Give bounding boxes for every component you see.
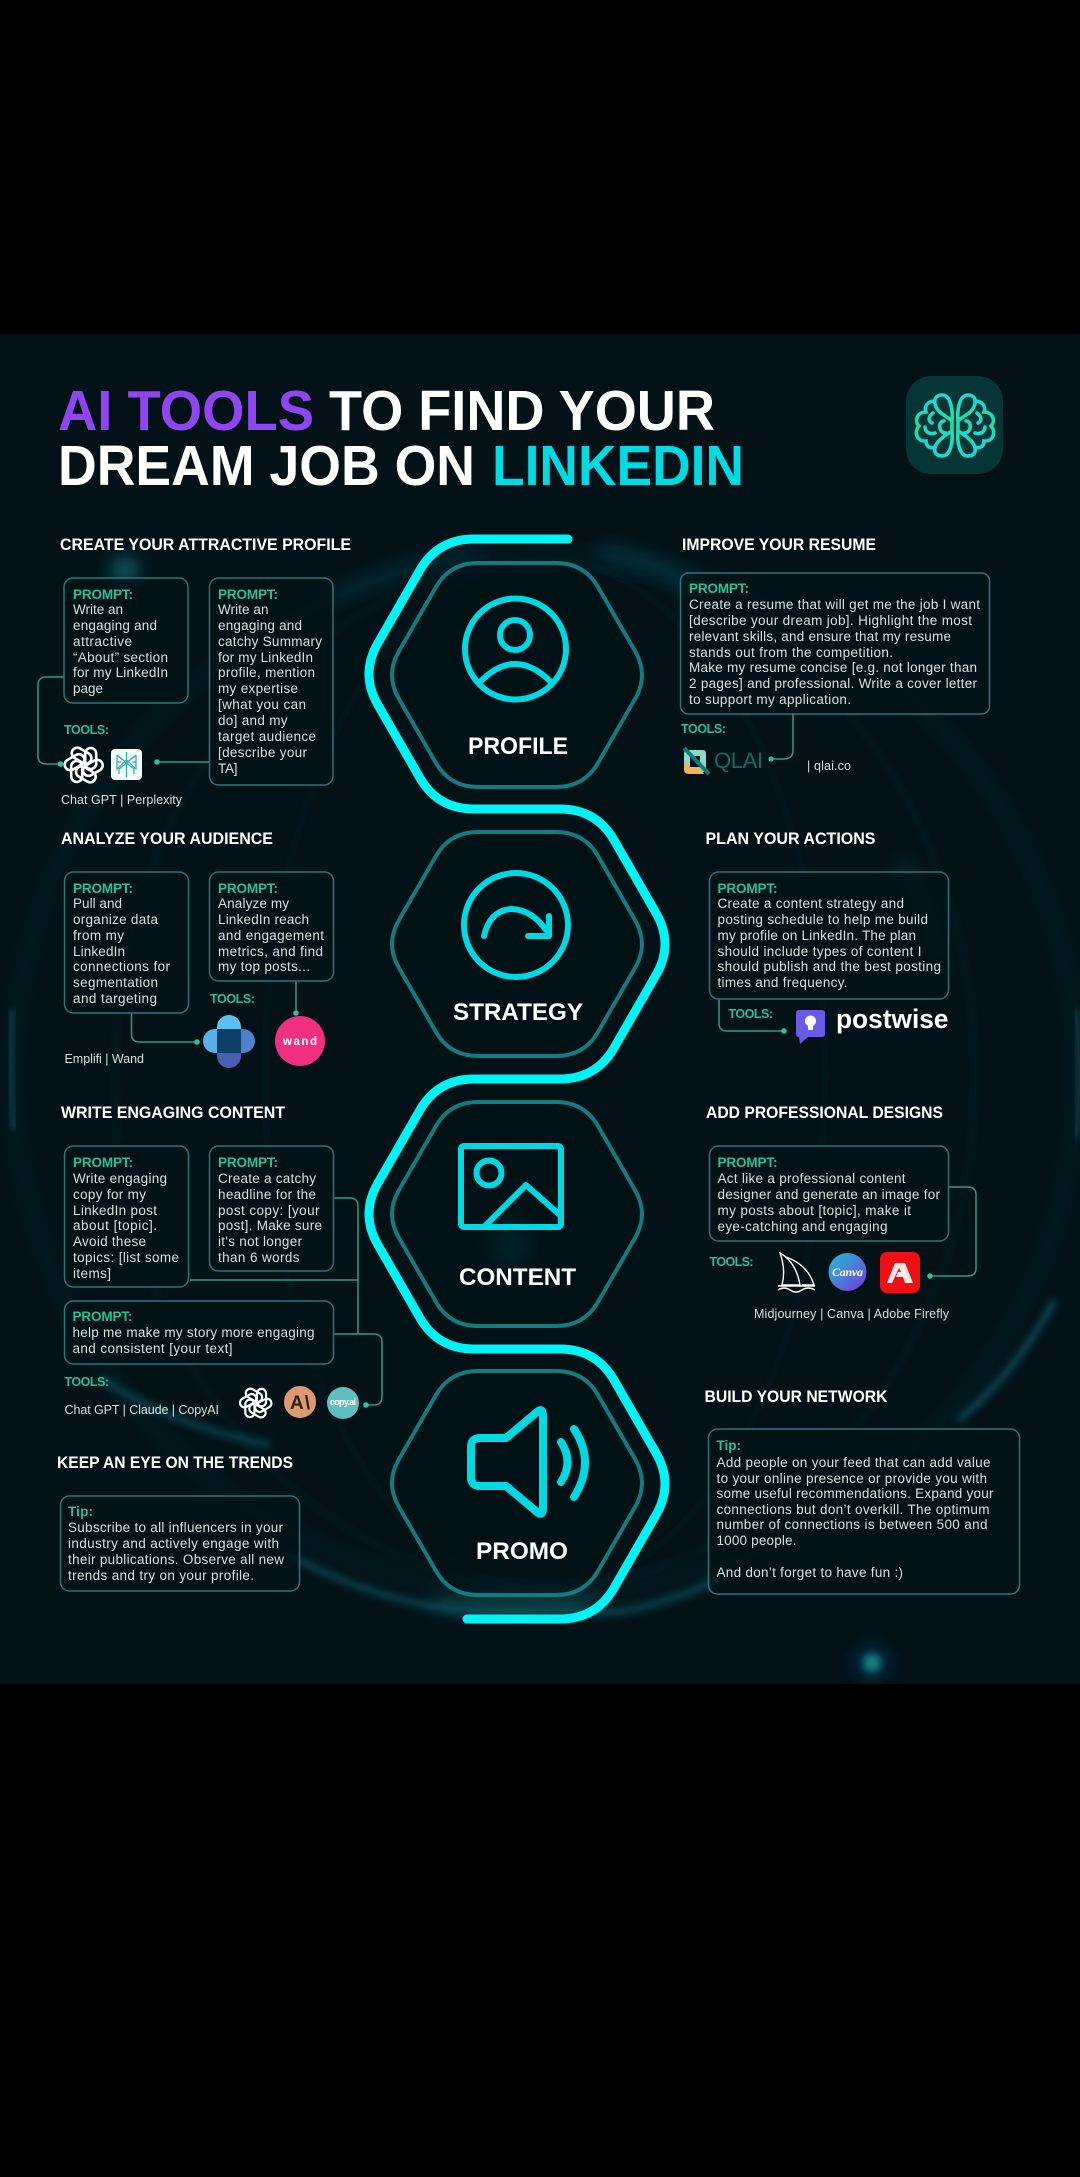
prompt box 2: Write an bbox=[218, 602, 268, 617]
icon: brain logo bbox=[906, 376, 1003, 474]
tip box: connections but don’t overkill. The optimum bbox=[716, 1502, 990, 1517]
tip box: to your online presence or provide you with bbox=[716, 1471, 987, 1486]
tip box bbox=[708, 1429, 1020, 1594]
prompt box 1: organize data bbox=[73, 912, 158, 927]
prompt box 1: connections for bbox=[73, 959, 170, 974]
prompt box: to support my application. bbox=[689, 692, 851, 707]
prompt box 2: Create a catchy bbox=[218, 1171, 316, 1186]
prompt box 2: my expertise bbox=[218, 681, 298, 696]
prompt box 2: Analyze my bbox=[218, 896, 289, 911]
prompt box 2: metrics, and find bbox=[218, 944, 323, 959]
prompt box: PROMPT: bbox=[689, 581, 749, 596]
hexagon: promo bbox=[392, 1371, 642, 1595]
heading: BUILD YOUR NETWORK bbox=[704, 1387, 888, 1406]
prompt box 1: LinkedIn bbox=[73, 944, 125, 959]
prompt box 1: about [topic]. bbox=[73, 1218, 157, 1233]
panel: improve your resume bbox=[680, 535, 990, 774]
prompt box 2: PROMPT: bbox=[218, 881, 278, 896]
prompt box 1: Write an bbox=[73, 602, 123, 617]
heading: PLAN YOUR ACTIONS bbox=[706, 829, 876, 848]
heading: ANALYZE YOUR AUDIENCE bbox=[61, 829, 273, 848]
panel: create your attractive profile bbox=[38, 535, 351, 807]
icon: profile bbox=[465, 598, 566, 700]
title: AI TOOLS bbox=[58, 379, 314, 443]
icon: chatgpt bbox=[63, 746, 105, 784]
icon: postwise bbox=[796, 1010, 825, 1044]
tools label: TOOLS: bbox=[210, 992, 255, 1006]
label: PROFILE: PROFILE bbox=[468, 733, 568, 760]
prompt box 2: TA] bbox=[218, 761, 238, 776]
connectors bbox=[190, 1198, 382, 1408]
tools label: TOOLS: bbox=[728, 1007, 773, 1021]
tool names: Midjourney | Canva | Adobe Firefly bbox=[754, 1307, 950, 1321]
prompt box 1: engaging and bbox=[73, 618, 157, 633]
icon: wand bbox=[275, 1016, 325, 1066]
prompt box 2: PROMPT: bbox=[218, 587, 278, 602]
prompt box: Create a resume that will get me the job I want bbox=[689, 597, 980, 612]
icon: adobe firefly bbox=[880, 1252, 920, 1293]
prompt box 2: [what you can bbox=[218, 697, 306, 712]
tip box: Tip: bbox=[68, 1504, 93, 1519]
tip box: number of connections is between 500 and bbox=[716, 1517, 988, 1532]
prompt box 3: and consistent [your text] bbox=[72, 1341, 232, 1356]
heading: ADD PROFESSIONAL DESIGNS bbox=[706, 1103, 943, 1122]
postwise wordmark: postwise bbox=[836, 1004, 948, 1034]
tools label: TOOLS: bbox=[710, 1255, 754, 1269]
prompt box 2: and engagement bbox=[218, 928, 324, 943]
prompt box 2: do] and my bbox=[218, 713, 288, 728]
icon: claude: A\ bbox=[290, 1393, 311, 1414]
icon: canva: Canva bbox=[832, 1265, 863, 1279]
tip box: some useful recommendations. Expand your bbox=[716, 1486, 994, 1501]
prompt box 3 bbox=[64, 1301, 334, 1364]
prompt box 1: copy for my bbox=[73, 1187, 146, 1202]
tool names: Chat GPT | Claude | CopyAI bbox=[64, 1403, 219, 1417]
prompt box 2: PROMPT: bbox=[218, 1155, 278, 1170]
prompt box 2: post copy: [your bbox=[218, 1203, 320, 1218]
prompt box: posting schedule to help me build bbox=[718, 912, 928, 927]
tool names: Chat GPT | Perplexity bbox=[61, 793, 183, 807]
prompt box 2: target audience bbox=[218, 729, 316, 744]
prompt box: relevant skills, and ensure that my resume bbox=[689, 629, 951, 644]
qlai wordmark: QLAI bbox=[714, 748, 763, 773]
title: LINKEDIN bbox=[492, 434, 744, 498]
prompt box: should include types of content I bbox=[718, 944, 922, 959]
prompt box 3: PROMPT: bbox=[72, 1309, 132, 1324]
icon: emplifi bbox=[203, 1015, 255, 1068]
icon: claude bbox=[284, 1386, 316, 1418]
title: TO FIND YOUR bbox=[329, 379, 715, 443]
icon: strategy arrow bbox=[464, 873, 568, 977]
prompt box bbox=[680, 573, 990, 714]
connector bbox=[719, 999, 787, 1034]
hexagon: profile bbox=[392, 563, 642, 787]
prompt box: times and frequency. bbox=[718, 975, 848, 990]
prompt box 2: engaging and bbox=[218, 618, 302, 633]
prompt box bbox=[710, 872, 948, 999]
prompt box: should publish and the best posting bbox=[718, 959, 941, 974]
panel: analyze your audience bbox=[61, 829, 334, 1068]
prompt box 2: [describe your bbox=[218, 745, 308, 760]
prompt box: my posts about [topic], make it bbox=[718, 1203, 911, 1218]
heading: WRITE ENGAGING CONTENT bbox=[61, 1103, 286, 1122]
background panel bbox=[0, 334, 1080, 1684]
prompt box 2: it's not longer bbox=[218, 1234, 302, 1249]
hexagon: content bbox=[392, 1102, 642, 1326]
prompt box 1: attractive bbox=[73, 634, 132, 649]
icon: image bbox=[461, 1146, 561, 1227]
prompt box 2: profile, mention bbox=[218, 665, 315, 680]
tip box: And don’t forget to have fun :) bbox=[716, 1565, 903, 1580]
prompt box 2: catchy Summary bbox=[218, 634, 322, 649]
prompt box 1 bbox=[64, 578, 188, 703]
prompt box 1: and targeting bbox=[73, 991, 157, 1006]
prompt box: PROMPT: bbox=[718, 1155, 778, 1170]
prompt box 1: PROMPT: bbox=[73, 587, 133, 602]
tool names: Emplifi | Wand bbox=[64, 1052, 144, 1066]
prompt box 2: LinkedIn reach bbox=[218, 912, 309, 927]
icon: canva bbox=[828, 1253, 866, 1291]
infographic canvas bbox=[0, 334, 1080, 1684]
prompt box 2 bbox=[210, 578, 333, 785]
panel: keep an eye on the trends bbox=[57, 1453, 300, 1591]
prompt box 2: post]. Make sure bbox=[218, 1218, 322, 1233]
tip box: Subscribe to all influencers in your bbox=[68, 1520, 284, 1535]
neon serpentine line bbox=[369, 539, 665, 1619]
prompt box 1: Write engaging bbox=[73, 1171, 167, 1186]
prompt box: stands out from the competition. bbox=[689, 645, 893, 660]
prompt box: my profile on LinkedIn. The plan bbox=[718, 928, 916, 943]
tools label: TOOLS: bbox=[64, 723, 109, 737]
prompt box: 2 pages] and professional. Write a cover letter bbox=[689, 676, 978, 691]
background sphere glow bbox=[10, 552, 1079, 1680]
prompt box 1: PROMPT: bbox=[73, 881, 133, 896]
prompt box 1: Avoid these bbox=[73, 1234, 146, 1249]
icon: speaker bbox=[471, 1410, 585, 1514]
label: CONTENT: CONTENT bbox=[459, 1264, 576, 1291]
prompt box: eye-catching and engaging bbox=[718, 1219, 888, 1234]
prompt box 2 bbox=[210, 1146, 334, 1271]
connector bbox=[927, 1187, 976, 1279]
icon: wand: wand bbox=[282, 1036, 317, 1048]
prompt box 1: from my bbox=[73, 928, 124, 943]
prompt box 1: “About” section bbox=[73, 650, 168, 665]
icon: chatgpt bbox=[238, 1387, 273, 1419]
panel: plan your actions bbox=[706, 829, 948, 1044]
prompt box 1: Pull and bbox=[73, 896, 122, 911]
label: STRATEGY: STRATEGY bbox=[453, 999, 583, 1026]
tools label: TOOLS: bbox=[64, 1375, 109, 1389]
tip box bbox=[60, 1496, 300, 1591]
prompt box 1: page bbox=[73, 681, 103, 696]
prompt box 1 bbox=[64, 872, 188, 1013]
title: DREAM JOB ON bbox=[58, 434, 475, 498]
tip box: Add people on your feed that can add value bbox=[716, 1455, 990, 1470]
tools label: TOOLS: bbox=[681, 722, 726, 736]
title bbox=[58, 379, 744, 498]
prompt box: Create a content strategy and bbox=[718, 896, 904, 911]
tip box: industry and actively engage with bbox=[68, 1536, 279, 1551]
tip box: Tip: bbox=[716, 1438, 741, 1453]
prompt box 2: headline for the bbox=[218, 1187, 316, 1202]
prompt box: designer and generate an image for bbox=[718, 1187, 940, 1202]
prompt box 1: PROMPT: bbox=[73, 1155, 133, 1170]
prompt box 2: my top posts... bbox=[218, 959, 310, 974]
icon: midjourney bbox=[778, 1253, 815, 1292]
hexagon: strategy bbox=[392, 832, 642, 1056]
prompt box 1: LinkedIn post bbox=[73, 1203, 157, 1218]
panel: write engaging content bbox=[61, 1103, 382, 1419]
tool name: | qlai.co bbox=[807, 759, 851, 773]
panel: add professional designs bbox=[706, 1103, 976, 1321]
prompt box 1: for my LinkedIn bbox=[73, 665, 168, 680]
icon: perplexity bbox=[111, 749, 142, 780]
connectors bbox=[132, 981, 299, 1045]
icon: copy.ai: copy.ai bbox=[330, 1397, 356, 1407]
prompt box 1: items] bbox=[73, 1266, 111, 1281]
prompt box 2 bbox=[210, 872, 334, 981]
label: PROMO: PROMO bbox=[476, 1538, 568, 1565]
prompt box: Make my resume concise [e.g. not longer than bbox=[689, 660, 977, 675]
prompt box 1 bbox=[64, 1146, 188, 1287]
connectors bbox=[38, 677, 209, 767]
heading: KEEP AN EYE ON THE TRENDS bbox=[57, 1453, 293, 1472]
prompt box 2: than 6 words bbox=[218, 1250, 300, 1265]
prompt box 3: help me make my story more engaging bbox=[72, 1325, 314, 1340]
icon: qlai bbox=[684, 748, 709, 774]
prompt box: [describe your dream job]. Highlight the most bbox=[689, 613, 972, 628]
prompt box: PROMPT: bbox=[718, 881, 778, 896]
tip box: 1000 people. bbox=[716, 1533, 796, 1548]
heading: CREATE YOUR ATTRACTIVE PROFILE bbox=[60, 535, 351, 554]
tip box: trends and try on your profile. bbox=[68, 1568, 254, 1583]
heading: IMPROVE YOUR RESUME bbox=[682, 535, 876, 554]
icon: copy.ai bbox=[327, 1387, 359, 1419]
prompt box 1: segmentation bbox=[73, 975, 158, 990]
prompt box: Act like a professional content bbox=[718, 1171, 906, 1186]
prompt box bbox=[710, 1146, 948, 1241]
panel: build your network bbox=[704, 1387, 1020, 1594]
prompt box 1: topics: [list some bbox=[73, 1250, 179, 1265]
tip box: their publications. Observe all new bbox=[68, 1552, 284, 1567]
prompt box 2: for my LinkedIn bbox=[218, 650, 313, 665]
connector bbox=[768, 714, 793, 762]
